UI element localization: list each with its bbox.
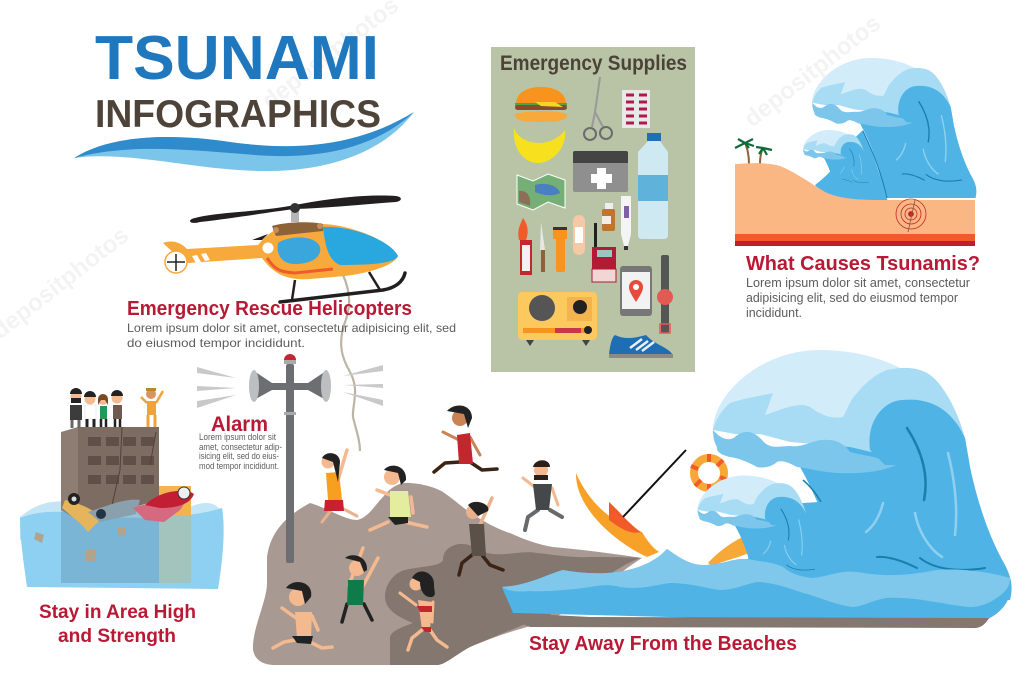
runner: yellow shirt [370,466,427,530]
icon: medicine bottle [602,203,615,231]
icon: pills [622,90,650,128]
water back [20,501,222,540]
person: woman green [98,394,108,427]
icon: thermometer [621,196,631,250]
runner: bearded man [523,460,562,530]
people on roof [70,388,163,428]
icon: title swoosh [74,112,414,171]
icon: knife [540,222,545,272]
runner: green shirt [342,548,378,622]
sand and crust [735,163,975,235]
icon: life ring [691,454,727,492]
runner: red shirt [434,406,497,472]
wrecked cars [62,487,194,532]
text: alarm body: Lorem ipsum dolor sit [199,432,276,442]
text: causes body: adipisicing elit, sed do eiusmod tempor [746,291,958,305]
heading: emergency rescue helicopters: Emergency Rescue Helicopters [127,298,412,320]
illustration: flooded building [20,388,224,589]
text: helicopters body: Lorem ipsum dolor sit amet, consectetur adipisicing elit, sed [127,321,456,335]
icon: banana [514,128,565,163]
illustration: what causes tsunamis [735,58,976,246]
sea floor [513,613,989,628]
small wave [698,476,850,590]
title: INFOGRAPHICS [95,93,381,136]
icon: first aid kit [573,151,628,192]
panel: emergency supplies [491,47,695,372]
icon: helicopter [163,195,405,302]
icon: epicenter [896,199,926,232]
icon: flashlight [553,227,567,272]
person: bearded man [70,388,82,428]
helicopter rope [341,275,360,451]
icon: palm trees [735,139,772,164]
runner: woman dark [459,498,503,575]
icon: burger [515,87,567,122]
text: alarm body: amet, consectetur adip- [199,442,282,452]
text: helicopters body: do eiusmod tempor incididunt. [127,336,305,350]
person: rescuer orange [141,388,163,427]
heading: alarm: Alarm [211,413,268,436]
icon: walkie talkie [592,223,616,282]
land [253,483,642,665]
debris [34,527,126,562]
icon: alarm siren [249,354,331,563]
runner: woman bikini [400,572,447,650]
heading: stay away from the beaches: Stay Away From the Beaches [529,633,797,655]
text: alarm body: mod tempor incididunt. [199,461,279,471]
icon: scissors [584,77,612,140]
icon: shoe [609,335,673,358]
icon: floating board [708,535,755,566]
watermarks: depositphotos [739,10,886,133]
alarm rays [197,365,383,408]
text: alarm body: isicing elit, sed do eius- [199,451,279,461]
title [74,24,414,171]
icon: orange boat [576,450,686,557]
icon: phone [620,266,652,316]
text: causes body: Lorem ipsum dolor sit amet, consectetur [746,276,970,290]
title: TSUNAMI [95,24,379,93]
watermarks [0,0,886,345]
icon: watch [657,255,673,333]
heading: what causes tsunamis: What Causes Tsunamis? [746,253,980,275]
heading: stay in area high: Stay in Area High [39,601,196,623]
icon: lighter [518,218,532,275]
sea [502,549,1011,625]
runner: shirtless man [273,582,332,648]
illustration: giant wave [502,350,1012,628]
person: man white shirt [84,391,96,427]
sea highlight [502,549,1010,607]
submerged building [61,510,191,583]
icon: radio [518,292,597,346]
water front [20,508,224,589]
building [61,427,191,526]
icon: bandage [573,215,585,255]
icon: small wave [803,130,888,202]
land shadow [385,544,640,665]
icon: large wave [812,58,976,198]
icon: water bottle [638,133,668,239]
people running [273,406,562,650]
heading: stay in area high: and Strength [58,625,176,647]
runner: girl orange [322,450,357,522]
text: causes body: incididunt. [746,306,802,320]
heading: emergency supplies: Emergency Supplies [500,52,687,75]
icon: map [517,174,565,210]
large wave [713,350,1012,600]
person: man brown [111,390,123,427]
